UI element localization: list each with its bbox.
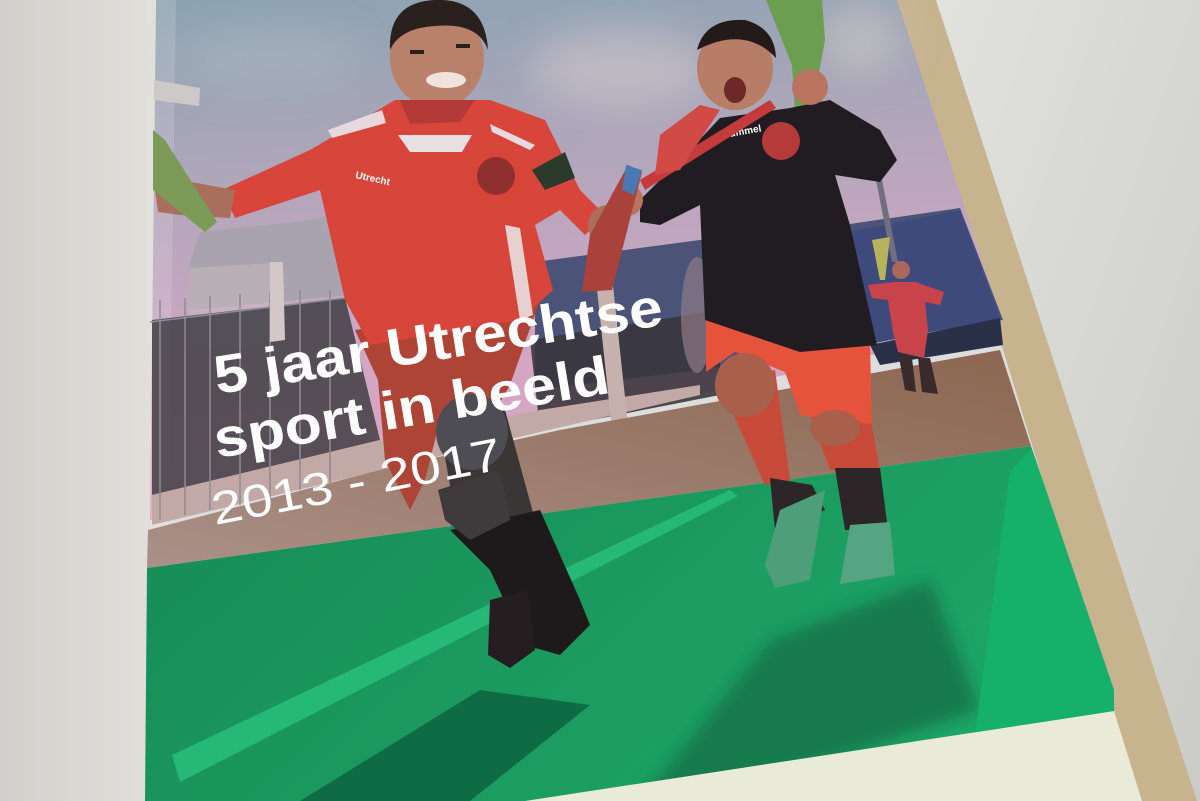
knee sock front leg — [436, 394, 508, 470]
clouds — [180, 5, 900, 110]
blue building middle — [535, 208, 1003, 390]
hands — [611, 184, 643, 216]
badge — [762, 122, 800, 160]
pitch shadows and line — [172, 448, 1114, 801]
armband — [532, 152, 575, 190]
light green wedge — [975, 448, 1114, 735]
book page edge — [897, 0, 1197, 801]
wrapped bouquet — [582, 165, 642, 292]
red lanyard — [640, 100, 776, 190]
year range: 2013 - 2017 — [207, 428, 506, 535]
light pitch line — [172, 490, 738, 782]
right hand — [588, 205, 628, 245]
shorts — [706, 320, 872, 424]
floodlight bracket — [154, 80, 200, 106]
blue wrapper — [622, 165, 642, 195]
distant player — [868, 237, 944, 394]
eyes — [410, 46, 470, 52]
fence — [150, 257, 1003, 525]
title line two: sport in beeld — [209, 345, 614, 470]
white side stripe — [505, 225, 533, 320]
blue building right — [850, 210, 1000, 345]
shirt — [222, 100, 605, 345]
far collar — [655, 105, 720, 175]
boy left — [153, 0, 642, 668]
white shoulder stripes — [328, 110, 386, 138]
club badge — [477, 157, 515, 195]
shadow left player — [300, 690, 590, 801]
table background left — [0, 0, 160, 801]
head — [697, 26, 773, 110]
sponsor: Utrecht — [354, 170, 392, 188]
head — [390, 8, 484, 108]
shoes — [765, 490, 825, 588]
sponsor text: hummel — [723, 123, 762, 141]
bouquet — [766, 0, 825, 132]
grey building left — [190, 210, 350, 310]
title: 5 jaar Utrechtse — [210, 277, 667, 406]
pitch surface brown — [147, 350, 1031, 568]
white bottom band of cover — [525, 711, 1142, 801]
neck collar — [400, 100, 475, 124]
black shirt — [640, 100, 897, 352]
far leg and socks — [440, 410, 535, 540]
left hand and arm — [155, 180, 235, 218]
shadow right player — [640, 580, 980, 801]
goal frame panel — [190, 263, 270, 350]
spine highlight — [150, 0, 176, 560]
legs — [718, 370, 790, 485]
floodlight pole — [876, 180, 898, 262]
cover sky — [150, 0, 1003, 520]
boy right — [611, 0, 897, 588]
shorts — [355, 300, 540, 510]
knees — [715, 353, 775, 417]
table background right — [930, 0, 1200, 801]
green band pitch — [145, 446, 1114, 801]
flowers left hand — [153, 130, 217, 232]
